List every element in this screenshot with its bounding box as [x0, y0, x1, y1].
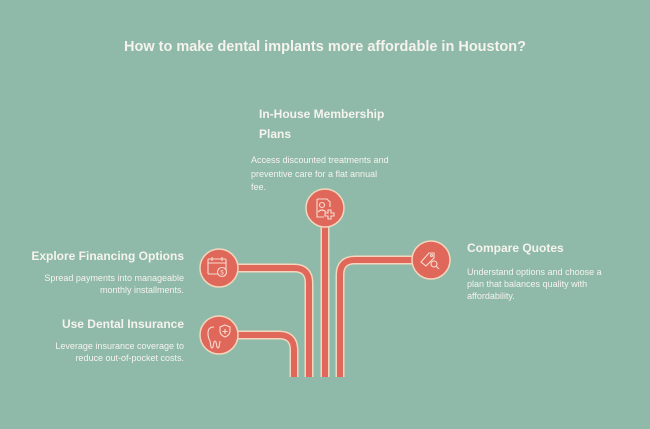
- text: insurance description: reduce out-of-pocket costs.: [75, 353, 184, 363]
- connector: financing: [219, 268, 309, 377]
- text: financing description: monthly installments.: [100, 285, 184, 295]
- text: membership description: preventive care for a flat annual: [251, 168, 377, 178]
- text: financing heading: Explore Financing Options: [31, 249, 184, 263]
- icon: quotes: [412, 241, 450, 279]
- text: insurance heading: Use Dental Insurance: [62, 317, 184, 331]
- text: financing description: Spread payments into manageable: [44, 273, 184, 283]
- text: quotes description: Understand options and choose a plan that balances quality with affordability.: [467, 267, 602, 301]
- connector: quotes: [340, 260, 431, 377]
- text: membership description: fee.: [251, 182, 266, 192]
- text: membership heading: In-House Membership Plans: [259, 107, 384, 141]
- icon: insurance: [200, 316, 238, 354]
- title: How to make dental implants more affordable in Houston?: [124, 39, 526, 55]
- text: insurance description: Leverage insurance coverage to: [55, 341, 184, 351]
- connector: membership: [320, 208, 330, 377]
- text: financing description: [44, 273, 184, 295]
- icon: membership: [306, 189, 344, 227]
- text: quotes heading: Compare Quotes: [467, 241, 564, 255]
- text: insurance description: [55, 341, 184, 363]
- text: membership description: Access discounted treatments and: [251, 155, 389, 165]
- connector: insurance: [219, 335, 294, 377]
- text: membership description: [251, 155, 389, 192]
- icon: financing: [200, 249, 238, 287]
- icon: financing: $: [220, 270, 224, 276]
